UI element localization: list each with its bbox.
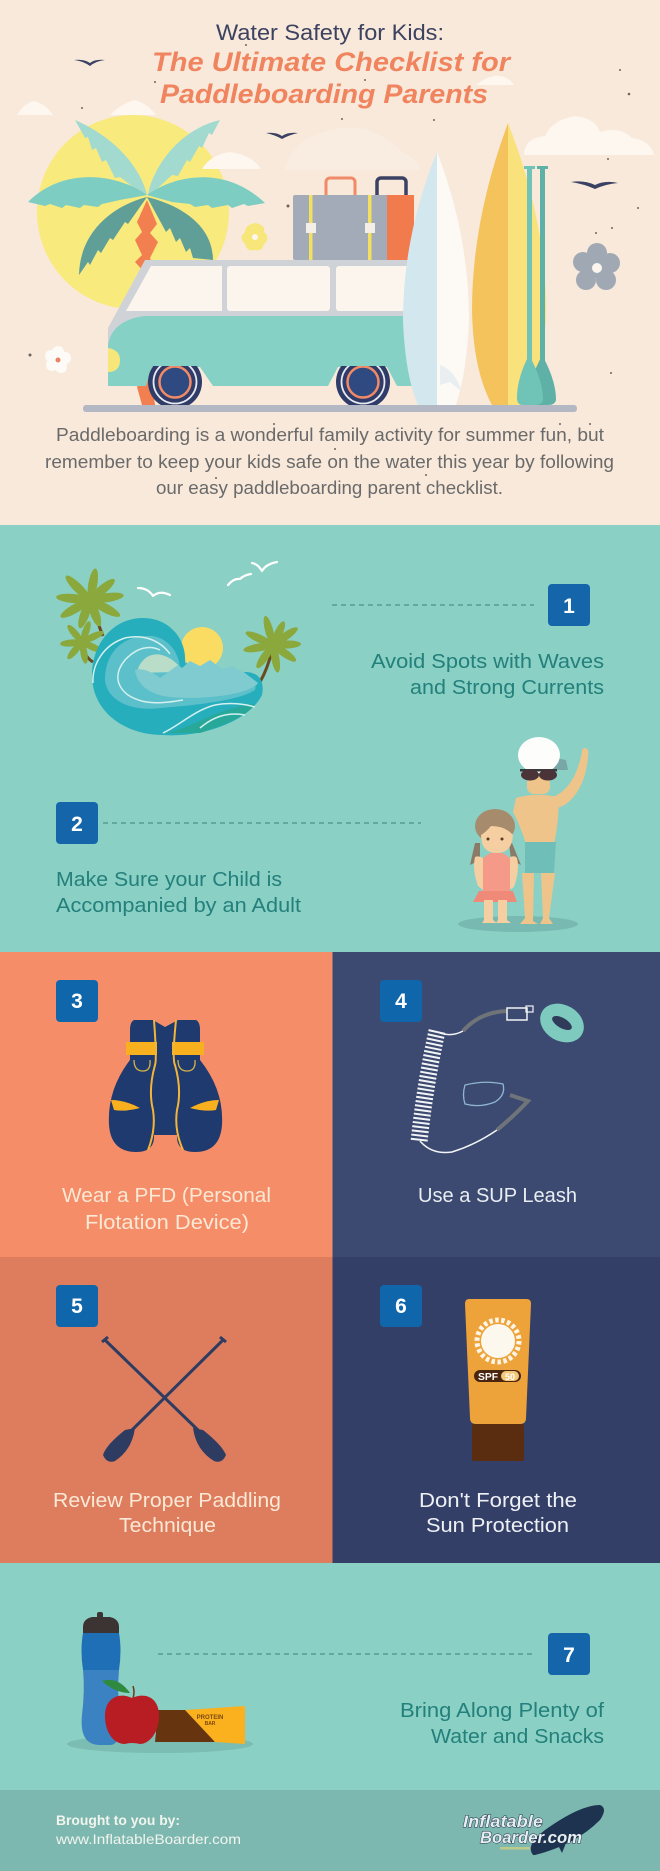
icon: wave with palms: [56, 568, 301, 735]
text: tip 2: Accompanied by an Adult: [56, 895, 301, 917]
icon: sunscreen tube: [465, 1299, 531, 1461]
icon: clouds: [17, 76, 654, 170]
text: tip 2: [56, 869, 301, 917]
text: tip 3: Flotation Device): [85, 1212, 249, 1234]
badge 2: 2: [71, 813, 83, 836]
footer: [0, 1790, 660, 1871]
ground line: [83, 405, 577, 412]
text: tip 6: Don't Forget the: [419, 1490, 577, 1512]
icon: water bottle, apple and protein bar: PROTEIN: [197, 1715, 223, 1721]
text: introduction: Paddleboarding is a wonderful family activity for summer fun, but: [56, 425, 604, 445]
icon: paddles: [517, 166, 556, 405]
text: tip 7: Bring Along Plenty of: [400, 1700, 604, 1722]
badge 2: [56, 802, 98, 844]
icon: life vest: [109, 1020, 222, 1152]
text: tip 7: [400, 1700, 604, 1748]
panel: tips 1 and 2: [0, 525, 660, 952]
icon: birds: [74, 60, 618, 189]
text: tip 2: Make Sure your Child is: [56, 869, 282, 891]
text: credit: [55, 1812, 241, 1847]
heading: title: Water Safety for Kids:: [216, 20, 444, 45]
badge 6: 6: [395, 1295, 407, 1318]
icon: sunscreen tube: SPF: [478, 1372, 498, 1383]
logo: Inflatable Boarder: [463, 1805, 604, 1855]
badge 3: 3: [71, 990, 83, 1013]
badge 6: [380, 1285, 422, 1327]
icon: water bottle, apple and protein bar: [67, 1612, 253, 1753]
badge 1: [548, 584, 590, 626]
text: introduction: [45, 425, 614, 498]
text: introduction: our easy paddleboarding parent checklist.: [156, 478, 503, 498]
text: tip 3: [62, 1185, 271, 1234]
text: tip 1: Avoid Spots with Waves: [371, 651, 604, 673]
icon: camper van: [108, 260, 420, 409]
panel: header: [17, 24, 654, 498]
icon: grey flower: [573, 243, 620, 290]
badge 5: 5: [71, 1295, 83, 1318]
panel: tip 4 leash: [332, 952, 660, 1257]
badge 1: 1: [563, 595, 575, 618]
connector line 1: [332, 604, 534, 606]
text: tip 1: [371, 651, 604, 699]
text: tip 7: Water and Snacks: [431, 1726, 604, 1748]
text: tip 5: Technique: [119, 1515, 216, 1537]
text: credit: Brought to you by:: [56, 1812, 180, 1828]
text: introduction: remember to keep your kids safe on the water this year by following: [45, 452, 614, 472]
badge 3: [56, 980, 98, 1022]
connector line 7: [158, 1653, 534, 1655]
badge 4: 4: [395, 990, 407, 1013]
badge 5: [56, 1285, 98, 1327]
connector line 2: [103, 822, 421, 824]
panel: tip 5 paddling: [0, 1257, 332, 1563]
heading: title: Paddleboarding Parents: [160, 79, 488, 109]
icon: seagulls: [138, 562, 277, 596]
icon: sun: [37, 115, 229, 309]
icon: white flower: [45, 346, 71, 373]
icon: yellow flower: [242, 223, 268, 250]
badge 7: 7: [563, 1644, 575, 1667]
text: tip 1: and Strong Currents: [410, 677, 604, 699]
text: tip 5: Review Proper Paddling: [53, 1490, 281, 1512]
text: tip 6: [419, 1490, 577, 1537]
icon: suitcases: [293, 178, 414, 260]
badge 7: [548, 1633, 590, 1675]
text: tip 6: Sun Protection: [426, 1515, 569, 1537]
icon: crossed paddles: [102, 1337, 226, 1462]
text: credit: www.InflatableBoarder.com: [55, 1831, 241, 1847]
icon: white surfboard: [403, 152, 469, 405]
icon: adult and child: [458, 737, 588, 932]
panel: tip 3 life vest: [0, 952, 332, 1257]
heading: title: [152, 20, 512, 109]
logo: Inflatable Boarder: Inflatable: [463, 1812, 543, 1831]
text: tip 5: [53, 1490, 281, 1537]
text: tip 3: Wear a PFD (Personal: [62, 1185, 271, 1207]
icon: sunscreen tube: 50: [505, 1372, 515, 1382]
icon: SUP leash: [419, 996, 591, 1153]
logo: Inflatable Boarder: Boarder.com: [480, 1828, 582, 1847]
panel: tip 7: [0, 1563, 660, 1790]
icon: yellow surfboard: [472, 123, 546, 405]
icon: water bottle, apple and protein bar: BAR: [205, 1721, 216, 1727]
icon: palm tree: [28, 120, 265, 275]
heading: title: The Ultimate Checklist for: [152, 47, 512, 77]
panel: tip 6 sunscreen: [332, 1257, 660, 1563]
text: tip 4: Use a SUP Leash: [418, 1185, 577, 1207]
badge 4: [380, 980, 422, 1022]
